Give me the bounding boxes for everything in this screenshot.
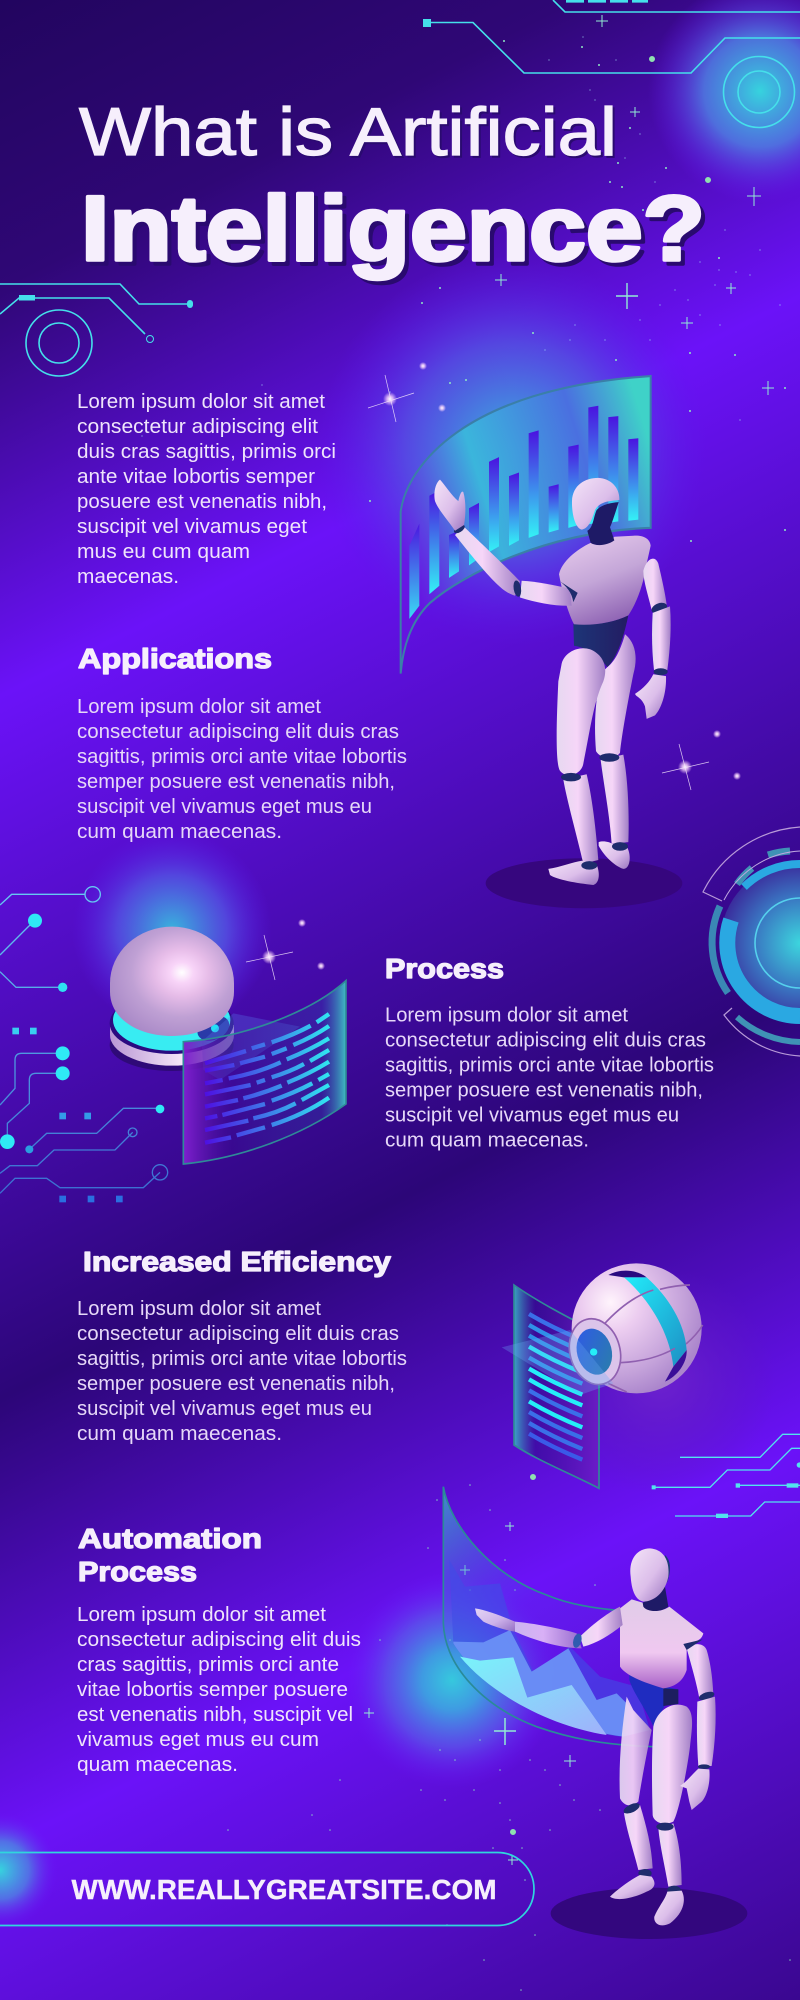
- eye sphere: [562, 1263, 703, 1393]
- floor shadow: [551, 1888, 747, 1939]
- text: automation process: Lorem ipsum dolor sit amet: [77, 1604, 326, 1626]
- intro paragraph: mus eu cum quam: [77, 541, 250, 563]
- robot body: [434, 478, 671, 885]
- heading: automation process: [78, 1523, 262, 1587]
- plus-shaped stars: [364, 15, 774, 1865]
- text: increased efficiency: Lorem ipsum dolor sit amet: [77, 1298, 321, 1320]
- text: increased efficiency: [77, 1298, 407, 1445]
- text: process: Lorem ipsum dolor sit amet: [385, 1004, 628, 1026]
- dome device: [110, 927, 234, 1071]
- heading: applications: Applications: [78, 643, 272, 674]
- floor shadow: [486, 858, 682, 908]
- glow: behind eye robot: [545, 1265, 775, 1495]
- screen: [514, 1285, 599, 1488]
- text: applications: semper posuere est venenatis nibh,: [77, 771, 395, 793]
- circuit: top right: [423, 0, 800, 128]
- intro paragraph: maecenas.: [77, 566, 179, 588]
- title: Intelligence?: [81, 178, 705, 280]
- heading: automation process: Automation: [78, 1523, 262, 1554]
- star field: [142, 37, 790, 1990]
- text: applications: suscipit vel vivamus eget mus eu: [77, 796, 372, 818]
- text: process: consectetur adipiscing elit duis cras: [385, 1030, 706, 1052]
- intro paragraph: [77, 391, 336, 588]
- circuit traces: [0, 887, 168, 1193]
- code screen: [183, 981, 346, 1164]
- light beam: [502, 1330, 613, 1395]
- circuit nodes: [0, 914, 164, 1202]
- intro paragraph: duis cras sagittis, primis orci: [77, 441, 336, 463]
- text: automation process: cras sagittis, primis orci ante: [77, 1654, 339, 1676]
- illustration: second robot with chart screen: [443, 1487, 747, 1939]
- glow: top right: [648, 0, 800, 203]
- text: automation process: consectetur adipiscing elit duis: [77, 1629, 361, 1651]
- illustration: dome device with code screen: [0, 887, 346, 1202]
- sparkles: [246, 362, 741, 980]
- text: increased efficiency: sagittis, primis orci ante vitae lobortis: [77, 1348, 407, 1370]
- glow: behind first robot: [317, 255, 707, 645]
- heading: increased efficiency: Increased Efficiency: [83, 1246, 391, 1277]
- text: automation process: [77, 1604, 361, 1776]
- intro paragraph: posuere est venenatis nibh,: [77, 491, 327, 513]
- intro paragraph: Lorem ipsum dolor sit amet: [77, 391, 325, 413]
- text: process: semper posuere est venenatis nibh,: [385, 1080, 703, 1102]
- heading: process: Process: [385, 953, 504, 984]
- right circuit traces: [652, 1434, 800, 1518]
- text: process: cum quam maecenas.: [385, 1130, 589, 1152]
- intro paragraph: ante vitae lobortis semper: [77, 466, 315, 488]
- holographic screen: [443, 1487, 653, 1747]
- intro paragraph: suscipit vel vivamus eget: [77, 516, 307, 538]
- illustration: round eye robot with screen: [502, 1263, 800, 1518]
- glow: bottom left: [0, 1812, 58, 1928]
- illustration: circular hud at right edge: [703, 827, 800, 1056]
- text: automation process: vitae lobortis semper posuere: [77, 1679, 348, 1701]
- text: process: sagittis, primis orci ante vitae lobortis: [385, 1054, 714, 1076]
- circuit: top left: [0, 284, 193, 376]
- illustration: robot with bar chart screen: [401, 376, 682, 908]
- intro paragraph: consectetur adipiscing elit: [77, 416, 318, 438]
- text: automation process: est venenatis nibh, suscipit vel: [77, 1704, 353, 1726]
- title: What is Artificial: [79, 94, 617, 170]
- text: automation process: quam maecenas.: [77, 1754, 238, 1776]
- glow: behind dome: [72, 830, 272, 1030]
- website pill: [0, 1852, 534, 1926]
- text: applications: consectetur adipiscing elit duis cras: [77, 721, 399, 743]
- text: increased efficiency: cum quam maecenas.: [77, 1423, 282, 1445]
- text: applications: [77, 696, 407, 843]
- holographic screen: [401, 376, 651, 674]
- text: applications: cum quam maecenas.: [77, 821, 282, 843]
- text: increased efficiency: consectetur adipiscing elit duis cras: [77, 1323, 399, 1345]
- text: increased efficiency: suscipit vel vivamus eget mus eu: [77, 1398, 372, 1420]
- text: applications: Lorem ipsum dolor sit amet: [77, 696, 321, 718]
- title: [79, 94, 705, 280]
- text: process: [385, 1004, 714, 1152]
- glow: behind second robot panel: [344, 1572, 560, 1788]
- bars: [409, 406, 638, 619]
- website pill: WWW.REALLYGREATSITE.COM: [72, 1874, 496, 1905]
- text: automation process: vivamus eget mus eu cum: [77, 1729, 319, 1751]
- text: increased efficiency: semper posuere est venenatis nibh,: [77, 1373, 395, 1395]
- robot body: [475, 1548, 716, 1925]
- heading: automation process: Process: [78, 1556, 197, 1587]
- text: applications: sagittis, primis orci ante vitae lobortis: [77, 746, 407, 768]
- text: process: suscipit vel vivamus eget mus eu: [385, 1104, 679, 1126]
